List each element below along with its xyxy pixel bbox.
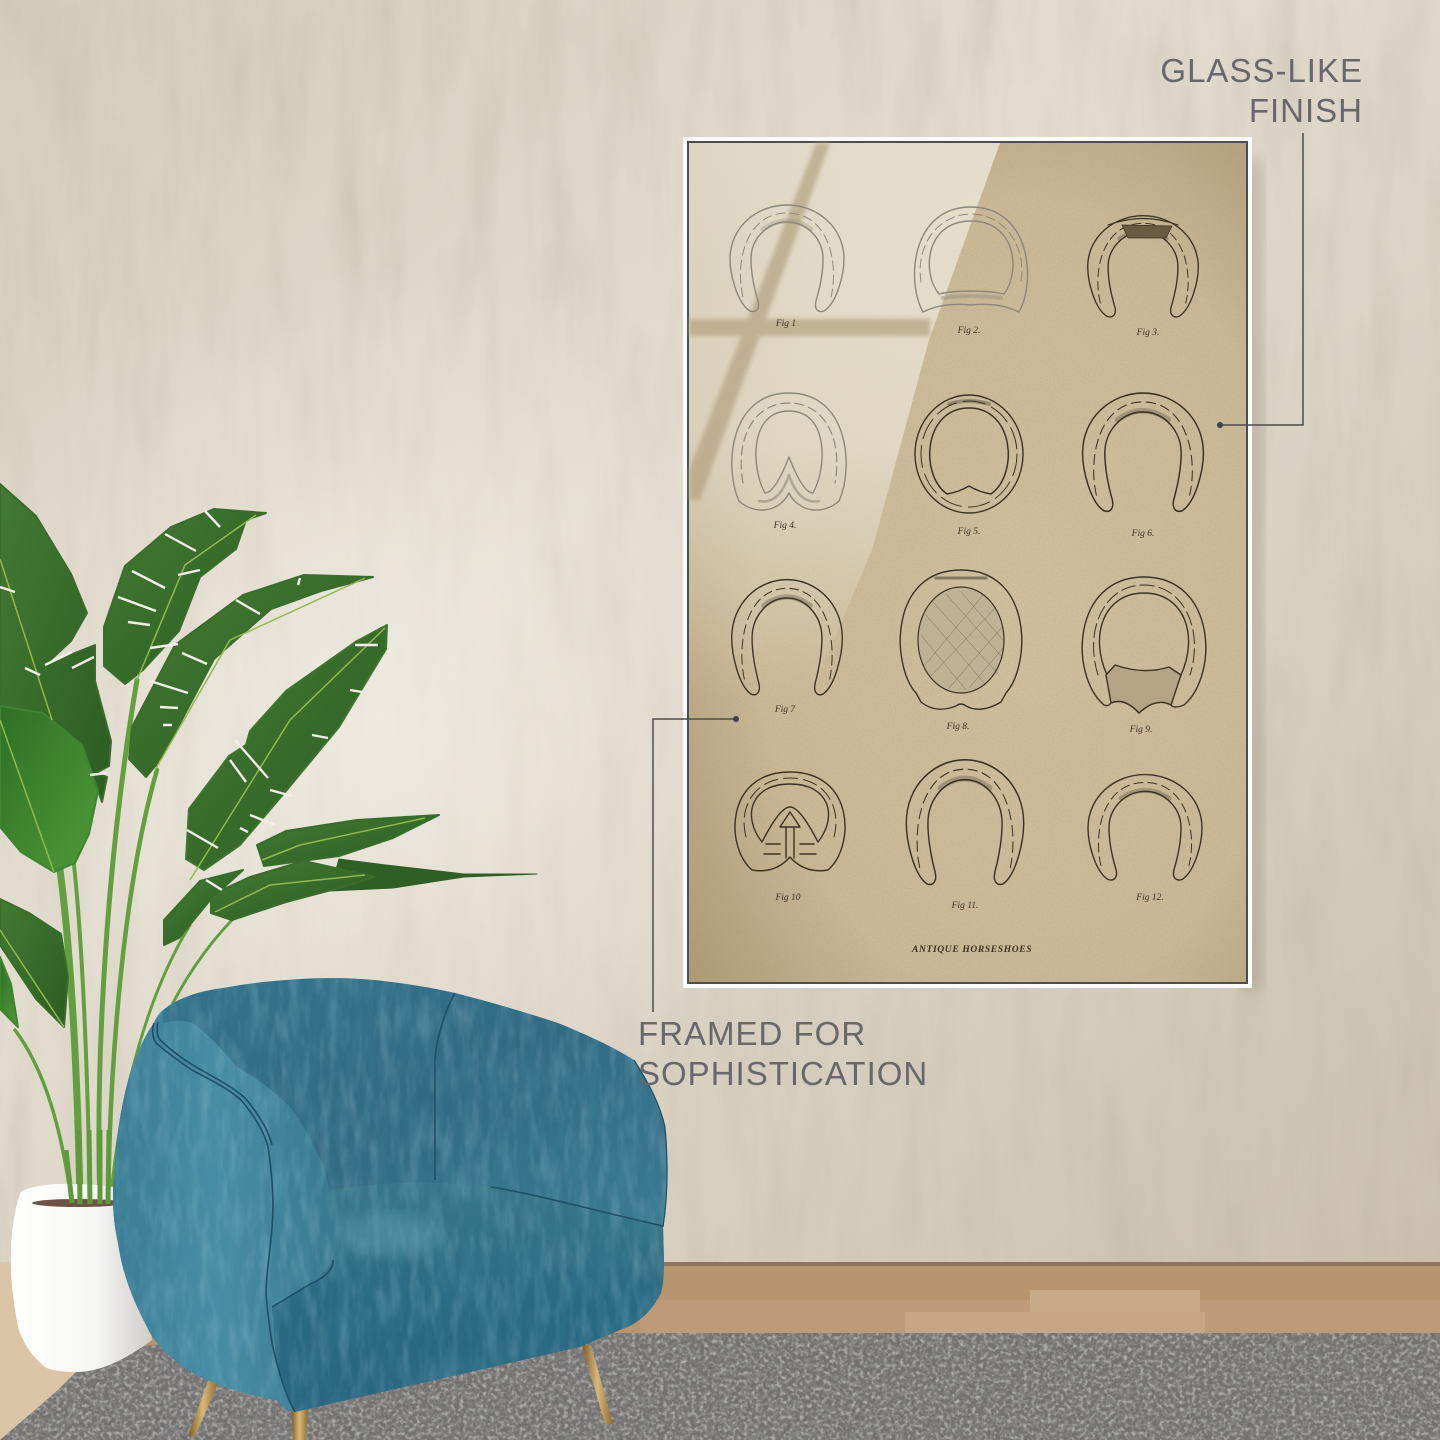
callout: framed for sophistication: SOPHISTICATION [638,1055,928,1092]
callout: glass-like finish: FINISH [1249,92,1363,129]
framed artwork: antique horseshoes [683,137,1264,990]
artwork title: ANTIQUE HORSESHOES [911,945,1032,955]
row 2 of horseshoes [732,393,1203,513]
row 4 of horseshoes [735,760,1202,884]
figure captions: Fig 9. [1129,725,1152,735]
row 3 of horseshoes [732,570,1206,713]
chair back [100,970,680,1270]
leaf: lower right front [211,861,375,920]
callout: glass-like finish: GLASS-LIKE [1160,52,1363,89]
grey rug [0,1330,1440,1440]
leaf: second centre [129,575,373,777]
window-frame shadows in reflection [689,143,930,500]
chair seat cushion [272,1183,670,1420]
row 1 of horseshoes [730,205,1198,317]
figure captions: Fig 2. [957,326,980,336]
callout: glass-like finish [1160,52,1363,428]
stem bases above the pot soil [66,1130,109,1204]
dark inner edge [687,141,1248,984]
glass reflection [689,143,1000,720]
wooden floor [0,1262,1440,1440]
aged paper [689,143,1246,982]
leaf: lower right upper [257,815,439,866]
leaf: top centre [104,509,266,684]
seat highlight [335,1213,445,1257]
figure captions: Fig 12. [1135,893,1164,903]
callout: framed for sophistication: FRAMED FOR [638,1015,866,1052]
leaf: small lower [164,870,243,945]
figure captions: Fig 6. [1131,529,1154,539]
figure captions: Fig 4. [773,521,796,531]
figure captions: Fig 10 [774,893,801,903]
leaf: front left [0,706,98,872]
chair legs [188,1345,613,1440]
chair fabric texture [100,970,680,1420]
plant leaves [0,484,537,1027]
figure captions [773,319,1164,911]
frame shadow [1240,160,1264,990]
white leaf tears [0,511,378,890]
figure captions: Fig 1 [775,319,796,329]
white frame [683,137,1252,988]
leaf: upper left [0,484,111,802]
white plant pot [11,1184,152,1372]
plant stems [15,680,232,1205]
chair left arm [113,1010,334,1412]
figure captions: Fig 8. [946,722,969,732]
leaf midribs [0,515,425,1027]
blue armchair [100,960,680,1440]
figure captions: Fig 5. [957,527,980,537]
figure captions: Fig 11. [951,901,978,911]
figure captions: Fig 3. [1136,328,1159,338]
leaf: tip extending right [330,859,537,891]
figure captions: Fig 7 [774,705,796,715]
callout: framed for sophistication [638,716,928,1092]
leaf: bottom left small [0,957,18,1027]
leaf: long right [186,625,387,870]
pot soil [32,1199,124,1207]
chair seams and piping [153,993,667,1412]
plant [0,484,537,1372]
leaf: bottom left [0,899,68,1027]
